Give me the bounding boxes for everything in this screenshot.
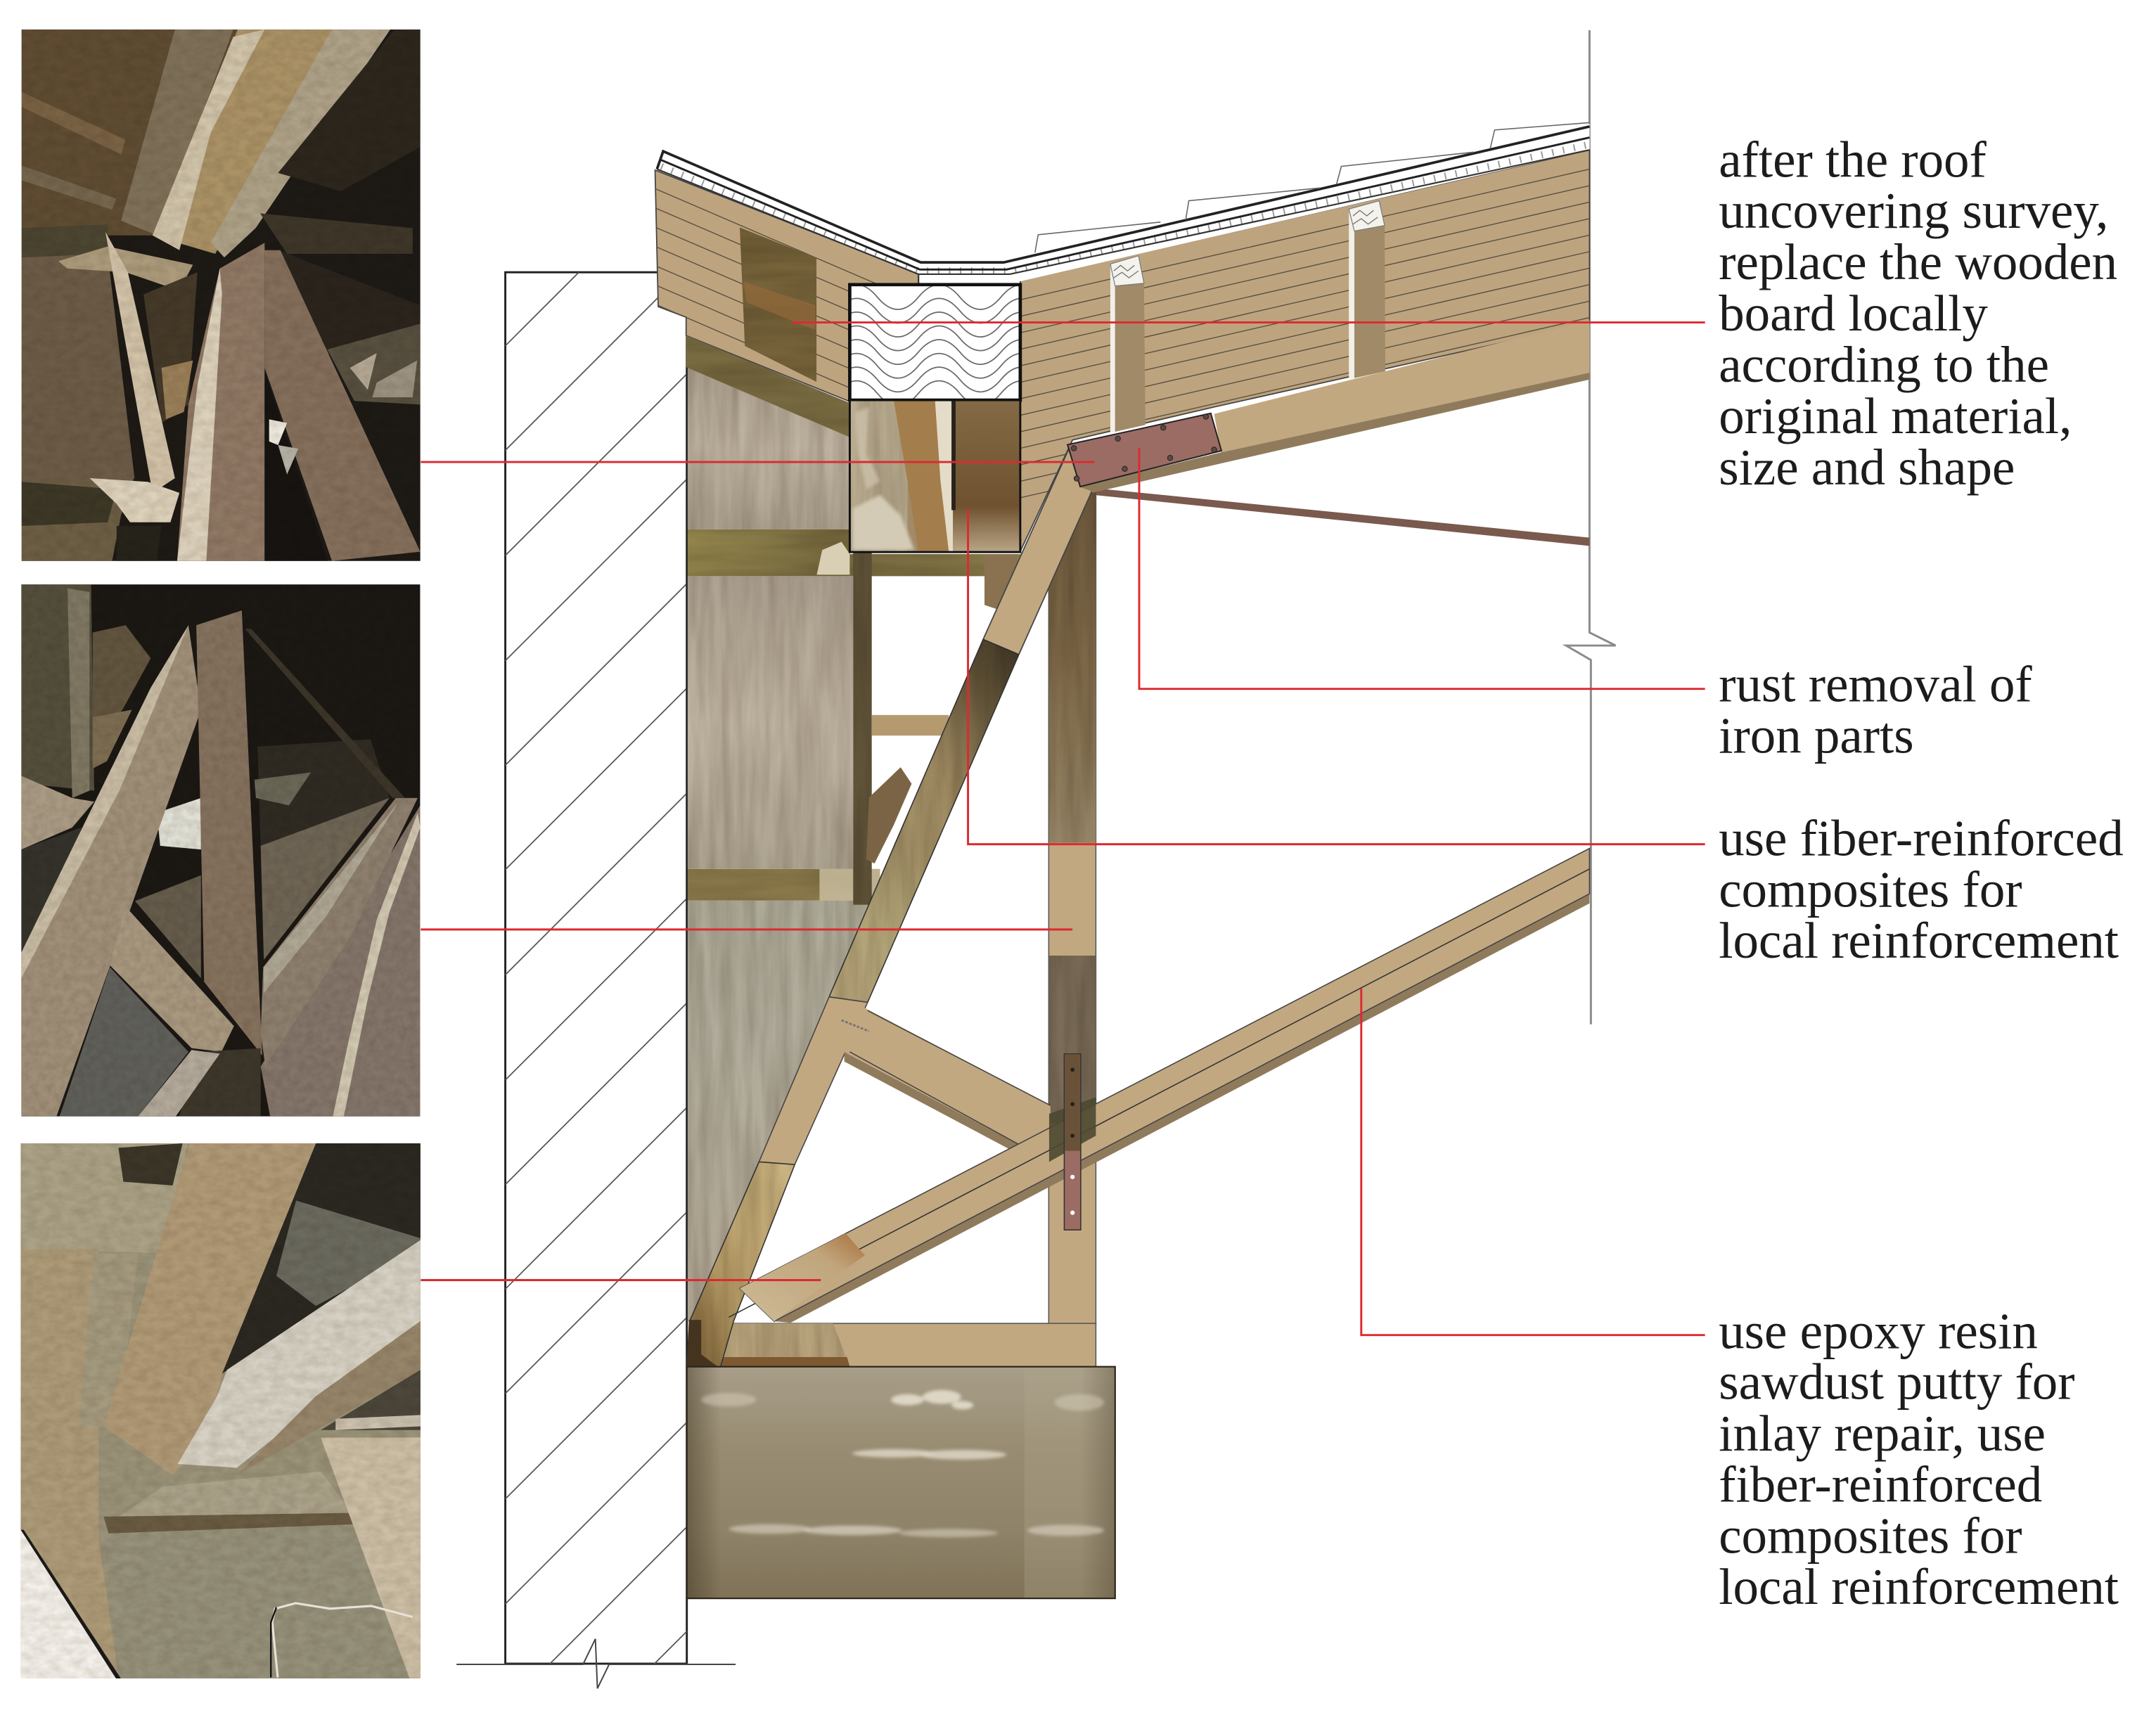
photo: roof truss joint with damaged rafter [22, 30, 421, 561]
lower horizontal beam [687, 869, 880, 901]
rafter one [1110, 262, 1115, 433]
annotation: epoxy resin repair: local reinforcement [1719, 1558, 2119, 1615]
upper horizontal beam [687, 529, 1025, 576]
middle concrete panel [687, 576, 853, 869]
boards left roof panel [655, 170, 930, 437]
rust repair section [740, 1233, 865, 1321]
annotation: roof board replacement: size and shape [1719, 439, 2015, 496]
right centre line with break symbol [1566, 30, 1616, 1024]
timber end grain replacement block [848, 283, 1022, 402]
concrete footing block [687, 1367, 1115, 1598]
rafter two [1349, 209, 1354, 380]
photo: strut foot at the masonry wall [20, 1143, 421, 1678]
red leader lines [421, 323, 1705, 1335]
masonry wall section with diagonal hatch [506, 272, 687, 1664]
boards right roof panel [1020, 150, 1589, 551]
replaced board photo patch [740, 227, 816, 382]
photo section [829, 639, 1019, 1002]
annotation: rust removal: iron parts [1719, 707, 1914, 764]
vertical iron strap [1064, 1054, 1081, 1230]
tan repaired section upper [983, 447, 1094, 655]
slender vertical post [853, 553, 872, 905]
cross brace [842, 1006, 1051, 1150]
long strut [729, 848, 1589, 1323]
vertical king post [1048, 485, 1096, 1324]
annotation: rust removal: rust removal of [1719, 655, 2032, 712]
annotation: roof board replacement: after the roof [1719, 131, 1987, 188]
main rafter beam [1079, 321, 1589, 492]
annotation: fiber reinforcement: local reinforcement [1719, 912, 2119, 969]
post photo section upper [1049, 492, 1096, 843]
concrete wall face and moss beams [687, 316, 1025, 1367]
roof layered covering [657, 124, 1589, 283]
decayed foot section [687, 1162, 795, 1367]
tan repaired section lower [759, 997, 868, 1164]
diagonal brace [687, 447, 1094, 1367]
annotation: epoxy resin repair: composites for [1719, 1508, 2022, 1565]
roof shingle outlines [1035, 122, 1589, 252]
lower concrete panel [687, 901, 871, 1321]
annotation: roof board replacement: according to the [1719, 336, 2049, 393]
annotation: epoxy resin repair: use epoxy resin [1719, 1302, 2038, 1359]
annotation: fiber reinforcement: composites for [1719, 861, 2022, 918]
decayed timber photo patch [849, 400, 1020, 552]
annotation: epoxy resin repair: fiber-reinforced [1719, 1456, 2042, 1512]
annotation: roof board replacement: uncovering survey, [1719, 182, 2108, 239]
annotation: epoxy resin repair: sawdust putty for [1719, 1354, 2075, 1411]
annotation: fiber reinforcement: use fiber-reinforced [1719, 809, 2124, 866]
sill plate [708, 1323, 1096, 1367]
annotation: epoxy resin repair: inlay repair, use [1719, 1405, 2046, 1462]
tie rod below rafter [1094, 488, 1589, 546]
ground line with break symbol [456, 1639, 736, 1688]
annotation: roof board replacement: replace the wooden [1719, 233, 2117, 290]
post photo section lower [1049, 956, 1096, 1124]
upper concrete panel [687, 367, 849, 529]
short horizontal stub [872, 715, 949, 736]
iron connector plate [1067, 413, 1221, 487]
annotation: roof board replacement: board locally [1719, 285, 1988, 342]
photo: truss brace and strut from below [21, 584, 421, 1117]
annotation: roof board replacement: original material, [1719, 387, 2072, 444]
broken timber fragment [866, 767, 911, 863]
post joint stain [1049, 1097, 1096, 1162]
decayed lump [984, 554, 1018, 609]
decayed sill end [708, 1323, 849, 1367]
moss band [686, 335, 849, 437]
